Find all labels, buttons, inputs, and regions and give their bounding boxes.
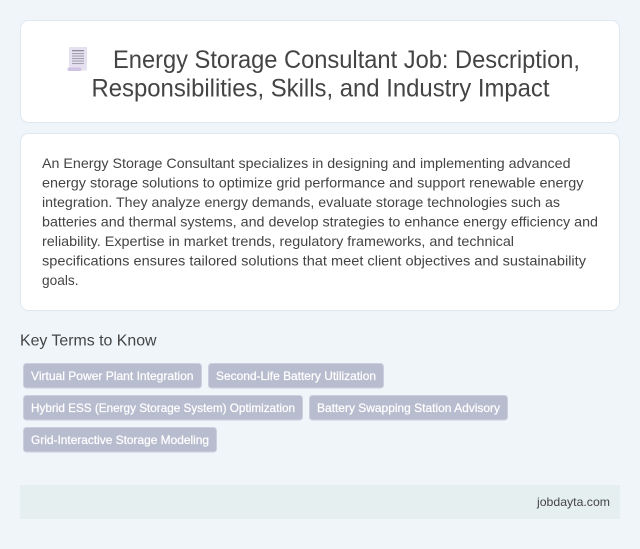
text block: job description: goals. <box>42 272 78 288</box>
tag: Battery Swapping Station Advisory <box>310 396 508 420</box>
text block: job description: An Energy Storage Consultant specializes in designing and implementing advanced <box>42 155 570 171</box>
tag: Battery Swapping Station Advisory: Battery Swapping Station Advisory <box>317 401 500 415</box>
heading: title <box>92 46 580 102</box>
text block: job description: energy storage solutions to optimize grid performance and support renewable energy <box>42 174 584 190</box>
heading: title: Energy Storage Consultant Job: Description, <box>113 46 580 74</box>
tag: Virtual Power Plant Integration: Virtual Power Plant Integration <box>31 369 193 383</box>
heading: title: Responsibilities, Skills, and Industry Impact <box>92 74 550 102</box>
text block: job description: batteries and thermal systems, and develop strategies to enhance energy efficiency and <box>42 214 598 230</box>
footer bar <box>20 485 620 519</box>
heading: key terms: Key Terms to Know <box>20 332 157 350</box>
text block: job description: specifications ensures tailored solutions that meet client objectives and sustainability <box>42 252 586 268</box>
text block: job description: reliability. Expertise in market trends, regulatory frameworks, and technical <box>42 233 514 249</box>
tag: Second-Life Battery Utilization <box>208 364 384 388</box>
tag: Second-Life Battery Utilization: Second-Life Battery Utilization <box>216 369 376 383</box>
tag: Grid-Interactive Storage Modeling: Grid-Interactive Storage Modeling <box>31 433 209 447</box>
text block: job description <box>42 155 598 288</box>
text block: job description: integration. They analyze energy demands, evaluate storage technologies such as <box>42 194 560 210</box>
tag: Hybrid ESS Optimization <box>24 396 302 420</box>
icon: document scroll <box>68 47 87 71</box>
panel: header card <box>20 20 620 122</box>
tag: Hybrid ESS Optimization: Hybrid ESS (Energy Storage System) Optimization <box>31 401 295 415</box>
tag: Virtual Power Plant Integration <box>24 364 202 388</box>
tag: Grid-Interactive Storage Modeling <box>24 428 216 452</box>
footer bar: jobdayta.com <box>536 495 610 509</box>
panel: description card <box>20 134 620 310</box>
